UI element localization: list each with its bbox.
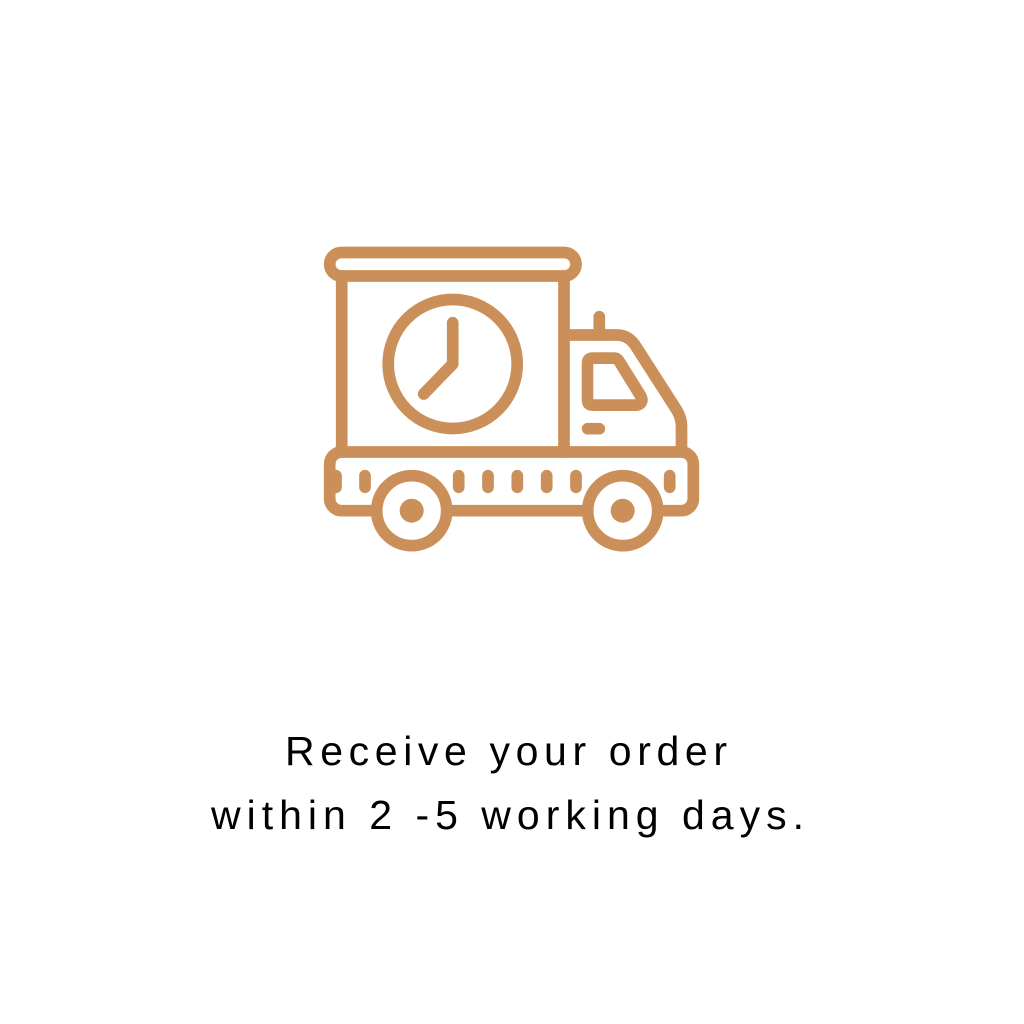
cab outline [564, 335, 682, 452]
front hub [611, 499, 635, 523]
caption line 1: Receive your order [285, 728, 727, 774]
antenna [593, 317, 605, 335]
icon: delivery truck with clock [330, 252, 693, 546]
clock hands [424, 323, 453, 394]
cargo box [342, 276, 564, 452]
truck box roof [330, 252, 576, 276]
cab window [582, 352, 648, 411]
front tire [588, 476, 658, 546]
clock face [388, 300, 517, 428]
rear hub [400, 499, 424, 523]
truck platform [330, 452, 693, 511]
rear wheel [377, 476, 447, 546]
rear tire [377, 476, 447, 546]
caption text [210, 728, 804, 838]
clock [388, 300, 517, 428]
door handle [588, 423, 599, 435]
platform ticks [336, 476, 670, 487]
caption line 2: within 2 -5 working days. [210, 792, 804, 838]
front wheel [588, 476, 658, 546]
